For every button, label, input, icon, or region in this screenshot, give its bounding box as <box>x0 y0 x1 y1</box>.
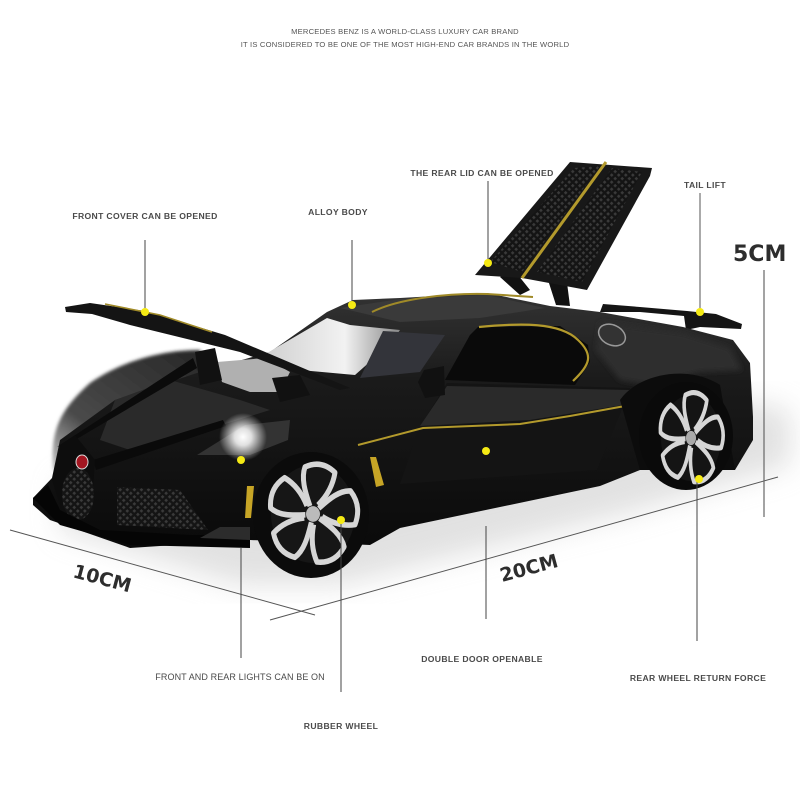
callout: double door: DOUBLE DOOR OPENABLE <box>421 654 543 664</box>
callout: double door <box>421 447 543 664</box>
car model <box>33 162 753 578</box>
callout: rear wheel: REAR WHEEL RETURN FORCE <box>630 673 766 683</box>
callout: rubber wheel: RUBBER WHEEL <box>304 721 378 731</box>
amber side markers <box>245 457 384 518</box>
callout: front cover: FRONT COVER CAN BE OPENED <box>72 211 218 221</box>
gold door-opening trim <box>479 325 588 381</box>
callout: lights: FRONT AND REAR LIGHTS CAN BE ON <box>155 672 325 682</box>
rear lid <box>475 162 652 306</box>
fuel cap <box>595 320 629 350</box>
windshield <box>262 318 400 375</box>
black hood-edge band <box>57 358 197 447</box>
nose and grille <box>52 435 95 505</box>
gold side line <box>358 406 625 445</box>
header text: MERCEDES BENZ IS A WORLD-CLASS LUXURY CAR BRAND <box>291 27 519 36</box>
rear wheel <box>620 374 735 490</box>
header text: IT IS CONSIDERED TO BE ONE OF THE MOST HIGH-END CAR BRANDS IN THE WORLD <box>241 40 570 49</box>
roof highlight <box>340 295 545 322</box>
callout: alloy body <box>308 207 368 309</box>
dimension: 20CM <box>270 477 778 620</box>
engine bay <box>100 380 270 450</box>
brand badge <box>76 455 88 469</box>
lower intake <box>117 487 208 530</box>
callout: rubber wheel <box>304 516 378 731</box>
ground shadow <box>60 400 790 585</box>
callout: front cover <box>72 211 218 316</box>
callout: rear wheel <box>630 475 766 683</box>
dimension: 10CM <box>10 530 315 615</box>
cabin interior <box>360 331 445 378</box>
dimension: 10CM: 10CM <box>71 561 134 597</box>
header text <box>241 27 570 49</box>
main body <box>33 293 753 548</box>
side mirror <box>418 366 445 398</box>
far side fender <box>52 350 210 470</box>
callout: rear lid: THE REAR LID CAN BE OPENED <box>410 168 554 178</box>
callout: tail lift: TAIL LIFT <box>684 180 726 190</box>
door opening <box>445 326 590 385</box>
matte rear highlight <box>596 322 742 385</box>
callout: rear lid <box>410 168 554 267</box>
front wheel <box>253 452 369 578</box>
callout: lights <box>155 456 325 682</box>
open front cover <box>65 303 350 390</box>
callout: tail lift <box>684 180 726 316</box>
hood support <box>195 348 310 402</box>
dimension: 5CM: 5CM <box>733 242 786 267</box>
fender crease <box>93 420 226 470</box>
dimension: 20CM: 20CM <box>498 550 561 587</box>
engine reflection <box>217 358 290 392</box>
door top panel <box>420 386 630 426</box>
callout: alloy body: ALLOY BODY <box>308 207 368 217</box>
headlight glow <box>197 413 290 461</box>
front splitter <box>33 485 250 548</box>
gold roof stripe <box>372 294 533 312</box>
rear wing <box>600 304 742 330</box>
open door <box>400 383 630 484</box>
